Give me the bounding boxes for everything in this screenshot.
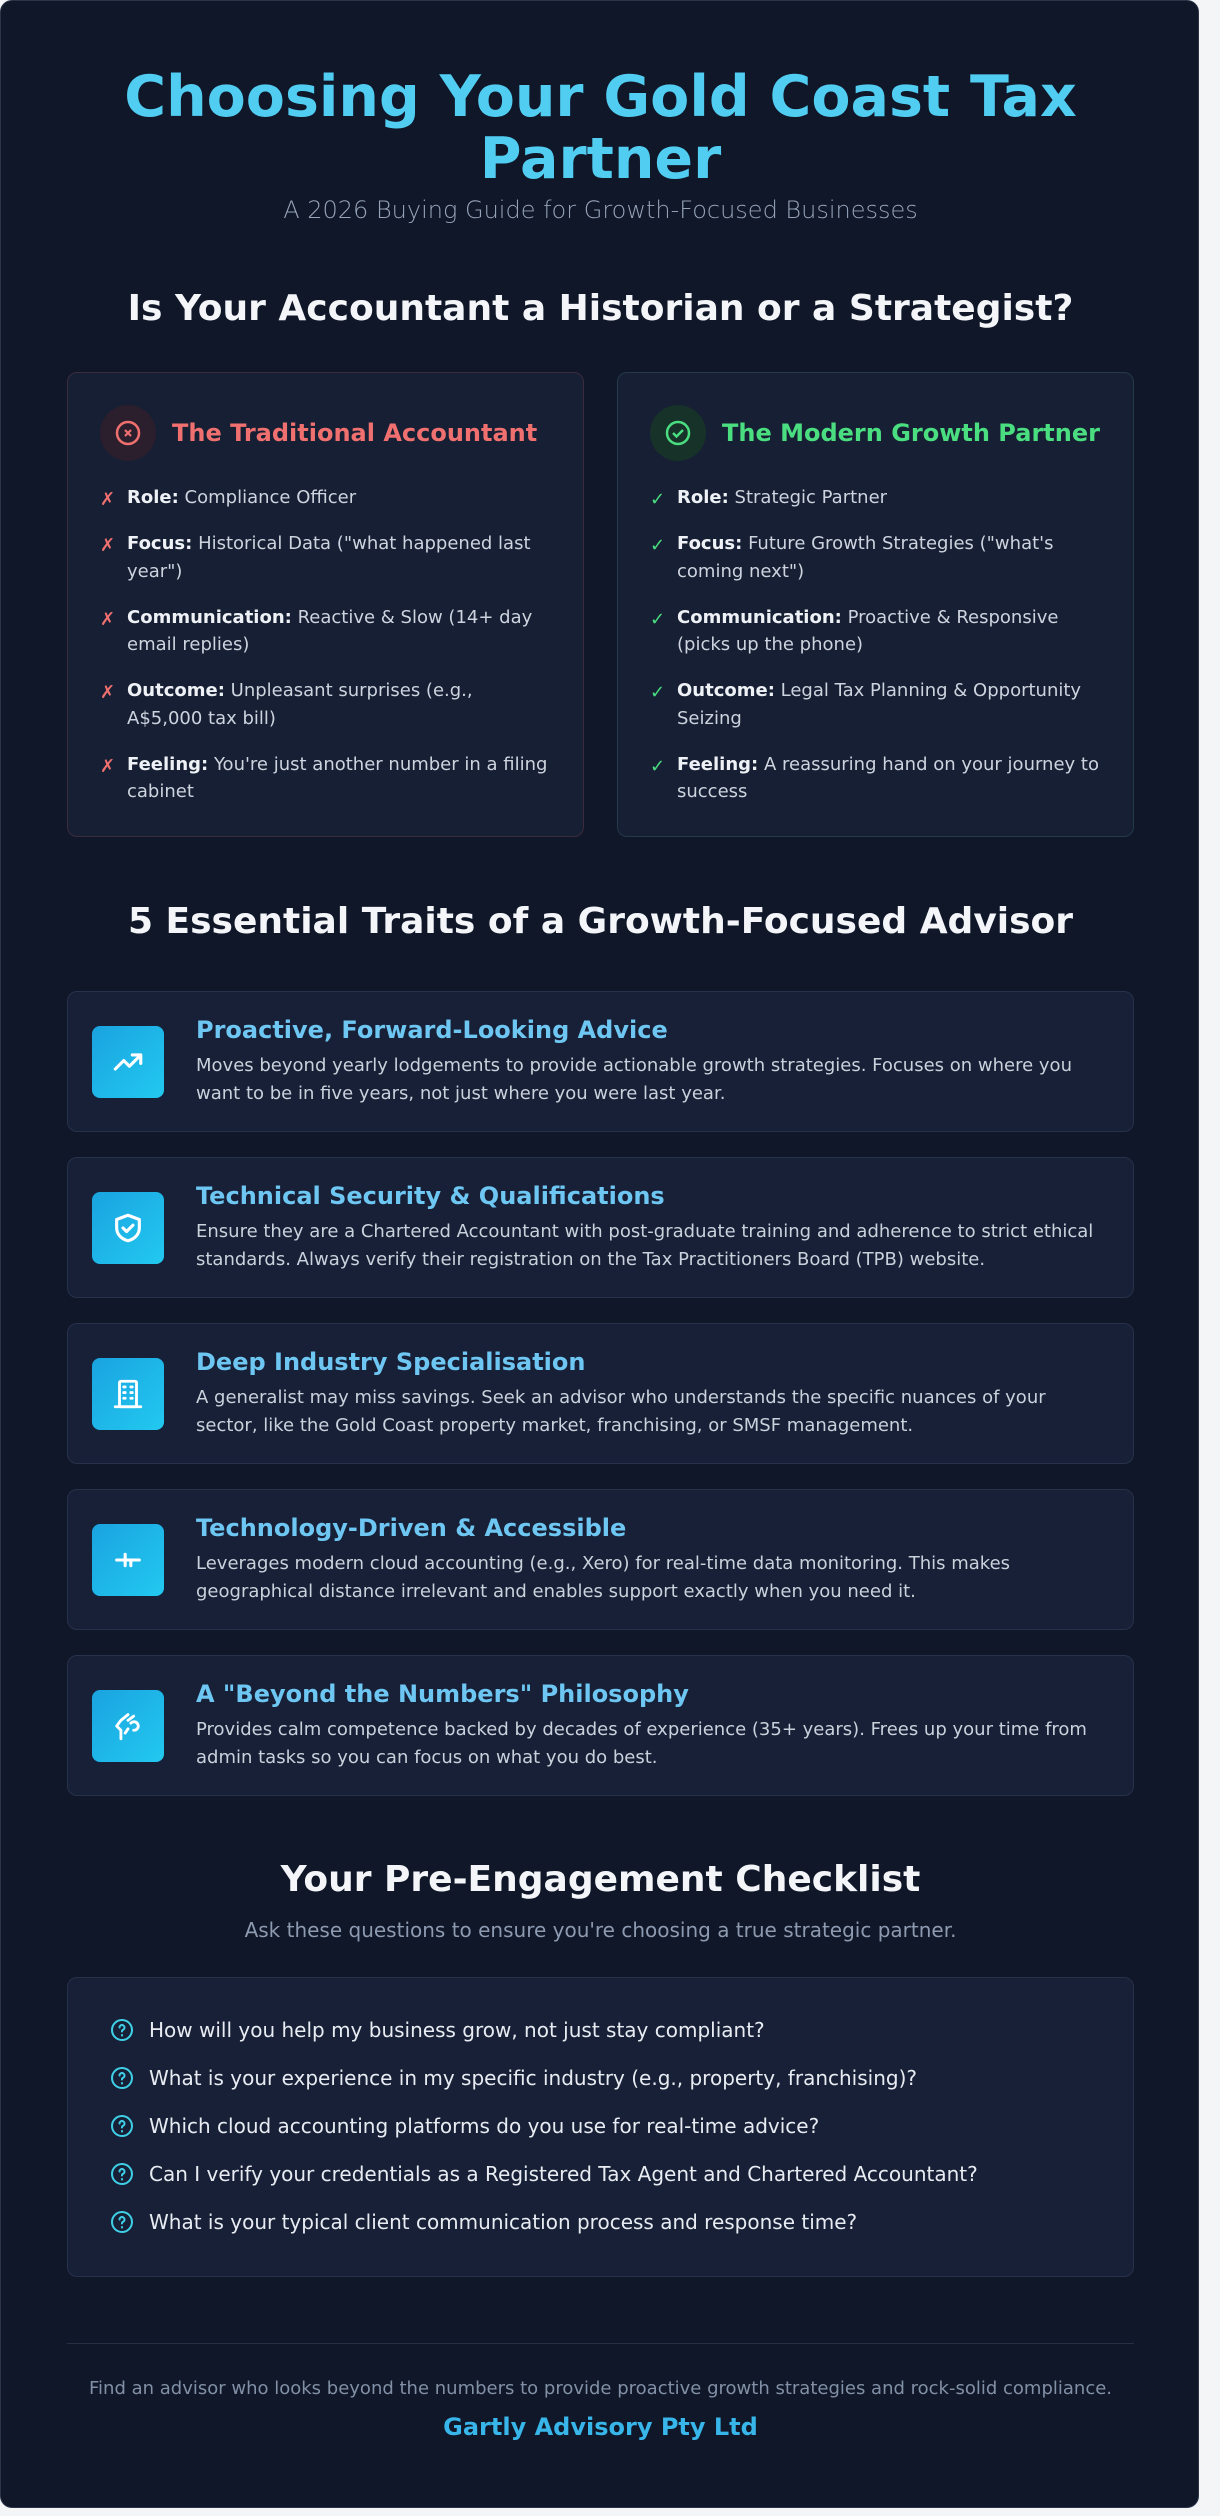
list: traditional traits: Focus: Historical Data ("what happened last year") [127,533,531,582]
panel: traditional accountant [67,372,584,837]
list: modern traits: Focus: Future Growth Strategies ("what's coming next") [677,533,1053,582]
icon: building [92,1358,164,1430]
trait 2: Ensure they are a Chartered Accountant with post-graduate training and adherence to strict ethical standards. Always verify their registration on the Tax Practitioners Board (TPB) website. [196,1221,1093,1270]
trait 3 [67,1323,1134,1464]
subtitle: A 2026 Buying Guide for Growth-Focused Businesses [283,196,918,224]
list: modern traits: ✓ [650,608,665,630]
checklist item 4: Can I verify your credentials as a Registered Tax Agent and Chartered Accountant? [149,2162,978,2186]
panel header: modern [650,405,1100,461]
list: modern traits: ✓ [650,535,665,556]
list: traditional traits: Role: Compliance Officer [127,487,356,508]
trait 1 [67,991,1134,1132]
icon: hand [92,1690,164,1762]
list: modern traits: Communication: Proactive & Responsive (picks up the phone) [677,606,1058,655]
list: traditional traits: ✗ [100,489,115,510]
heading: checklist: Your Pre-Engagement Checklist [281,1859,920,1900]
trait 4 [67,1489,1134,1630]
heading: historian vs strategist: Is Your Accountant a Historian or a Strategist? [128,288,1073,329]
checklist subtitle: Ask these questions to ensure you're choosing a true strategic partner. [245,1918,956,1942]
trait 2: Technical Security & Qualifications [196,1182,665,1210]
trait 5 [67,1655,1134,1796]
trait 4: Technology-Driven & Accessible [196,1514,626,1542]
list: traditional traits [100,487,547,802]
list: traditional traits: ✗ [100,535,115,556]
checklist item 5: What is your typical client communication process and response time? [149,2210,857,2234]
title [124,64,1077,192]
panel header: traditional: The Traditional Accountant [172,419,537,447]
icon: trending up [92,1026,164,1098]
list: modern traits: Feeling: A reassuring hand on your journey to success [677,754,1099,802]
list: modern traits: ✓ [650,489,665,510]
footer company: Gartly Advisory Pty Ltd [443,2413,758,2441]
list: traditional traits: ✗ [100,682,115,703]
panel header: traditional [100,405,537,461]
trait 3: A generalist may miss savings. Seek an advisor who understands the specific nuances of your sector, like the Gold Coast property market, franchising, or SMSF management. [196,1387,1046,1436]
list: traditional traits: Feeling: You're just another number in a filing cabinet [127,754,547,802]
list: modern traits [650,487,1099,802]
trait 3: Deep Industry Specialisation [196,1348,585,1376]
list: modern traits: ✓ [650,682,665,703]
icon: shield [92,1192,164,1264]
icon: cloud/plug [92,1524,164,1596]
trait 5: Provides calm competence backed by decades of experience (35+ years). Frees up your time from admin tasks so you can focus on what you do best. [196,1719,1087,1768]
title: Choosing Your Gold Coast Tax [124,64,1077,130]
trait 2 [67,1157,1134,1298]
trait 1: Proactive, Forward-Looking Advice [196,1016,668,1044]
panel: modern growth partner [617,372,1134,837]
footer text: Find an advisor who looks beyond the numbers to provide proactive growth strategies and rock-solid compliance. [89,2378,1112,2399]
trait 4: Leverages modern cloud accounting (e.g., Xero) for real-time data monitoring. This makes geographical distance irrelevant and enables support exactly when you need it. [196,1553,1010,1602]
list: modern traits: ✓ [650,756,665,776]
list: traditional traits: ✗ [100,608,115,630]
list: traditional traits: Communication: Reactive & Slow (14+ day email replies) [127,606,532,655]
checklist box [67,1977,1134,2277]
trait 5: A "Beyond the Numbers" Philosophy [196,1680,689,1708]
checklist item 2: What is your experience in my specific industry (e.g., property, franchising)? [149,2066,917,2090]
list: traditional traits: Outcome: Unpleasant surprises (e.g., A$5,000 tax bill) [127,680,473,728]
list: modern traits: Outcome: Legal Tax Planning & Opportunity Seizing [677,680,1081,728]
heading: 5 traits: 5 Essential Traits of a Growth-Focused Advisor [128,901,1073,942]
checklist item 3: Which cloud accounting platforms do you use for real-time advice? [149,2114,819,2138]
list: traditional traits: ✗ [100,756,115,776]
trait 1: Moves beyond yearly lodgements to provide actionable growth strategies. Focuses on where you want to be in five years, not just where you were last year. [196,1055,1072,1104]
panel header: modern: The Modern Growth Partner [722,419,1100,447]
checklist item 1: How will you help my business grow, not just stay compliant? [149,2018,765,2042]
title: Partner [480,126,721,192]
list: modern traits: Role: Strategic Partner [677,487,887,508]
